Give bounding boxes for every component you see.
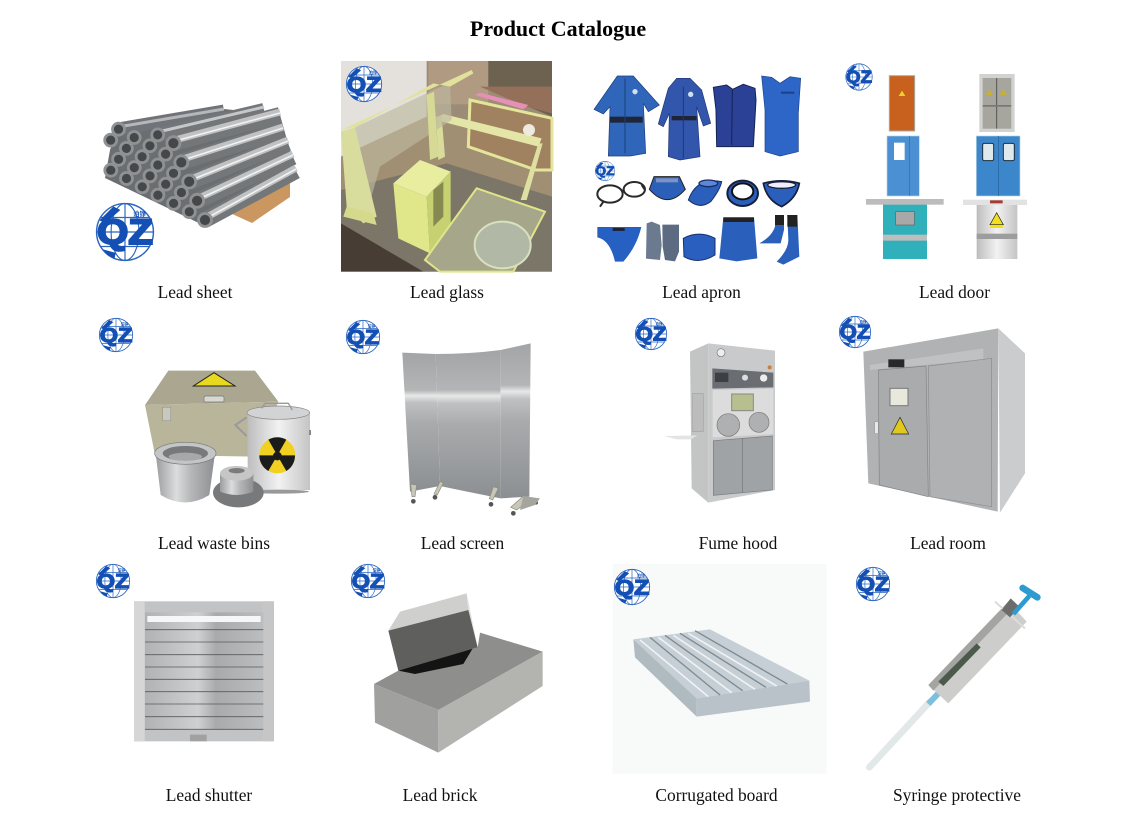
logo: QZ: [857, 574, 889, 596]
logo: QZ: [97, 571, 129, 593]
panel: lead apron: [594, 76, 801, 302]
image: three-fold lead screen: [402, 343, 540, 516]
logo: QZ: [100, 325, 132, 347]
label: Lead sheet: [158, 282, 233, 302]
logo: 泊铮: [368, 323, 375, 328]
image: six door types: [866, 74, 1027, 259]
logo: [99, 318, 133, 352]
logo: [635, 318, 667, 350]
logo: 泊铮: [655, 321, 663, 326]
label: Corrugated board: [655, 785, 778, 805]
image: louvered shutter: [134, 601, 274, 741]
label: Lead shutter: [166, 785, 252, 805]
logo: 泊铮: [121, 321, 128, 326]
image: shielded room: [863, 328, 1025, 513]
panel: lead room: [839, 316, 1025, 553]
logo: 泊铮: [133, 209, 146, 218]
label: Lead apron: [662, 282, 741, 302]
logo: 泊铮: [859, 319, 867, 324]
logo: [97, 204, 153, 260]
logo: QZ: [846, 69, 872, 87]
image: corrugated sheets: [613, 564, 827, 774]
logo: QZ: [595, 164, 615, 178]
logo: [846, 64, 872, 90]
logo: 泊铮: [878, 570, 885, 575]
logo: [346, 320, 380, 354]
panel: lead door: [846, 64, 1027, 302]
logo: QZ: [347, 327, 379, 349]
logo: QZ: [97, 213, 153, 252]
logo: [856, 567, 890, 601]
label: Fume hood: [699, 533, 778, 553]
logo: QZ: [636, 325, 667, 346]
label: Lead door: [919, 282, 990, 302]
image: lead glass panels photo: [341, 61, 552, 272]
panel: corrugated board: [613, 564, 827, 805]
logo: 泊铮: [637, 573, 645, 578]
panel: lead brick: [351, 564, 543, 805]
logo: [96, 564, 130, 598]
label: Lead waste bins: [158, 533, 270, 553]
label: Lead screen: [421, 533, 505, 553]
logo: QZ: [352, 571, 384, 593]
logo: 泊铮: [373, 567, 380, 572]
title: Product Catalogue: [470, 16, 646, 41]
label: Syringe protective: [893, 785, 1021, 805]
logo: [614, 569, 650, 605]
panel: lead shutter: [96, 564, 274, 805]
image: stacked lead pipes on pallet: [105, 107, 296, 226]
image: syringe shield: [869, 588, 1037, 767]
logo: 泊铮: [369, 70, 377, 75]
label: Lead glass: [410, 282, 484, 302]
panel: syringe protective: [856, 567, 1037, 805]
logo: 泊铮: [118, 567, 125, 572]
logo: [595, 161, 615, 181]
image: two lead bricks: [374, 593, 543, 753]
panel: fume hood: [635, 318, 778, 553]
image: waste bins and containers: [145, 371, 310, 507]
logo: [839, 316, 871, 348]
logo: [346, 66, 382, 102]
panel: lead glass: [341, 61, 552, 302]
logo: [351, 564, 385, 598]
logo: QZ: [347, 72, 381, 97]
logo: QZ: [840, 323, 871, 344]
label: Lead room: [910, 533, 986, 553]
logo: QZ: [615, 575, 649, 600]
label: Lead brick: [403, 785, 478, 805]
panel: lead sheet: [97, 107, 296, 302]
panel: lead screen: [346, 320, 540, 553]
panel: lead waste bins: [99, 318, 310, 553]
image: protective garments: [594, 76, 801, 265]
image: fume hood cabinet: [664, 343, 775, 503]
